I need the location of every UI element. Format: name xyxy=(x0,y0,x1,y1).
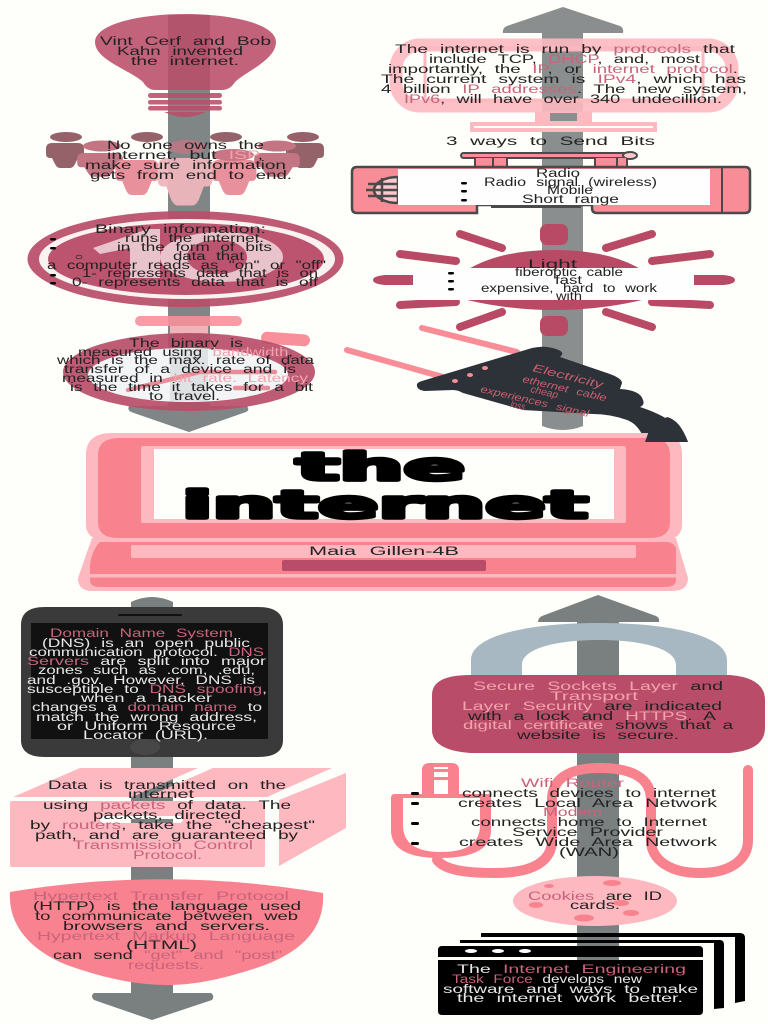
text: ISPs xyxy=(85,140,292,182)
text panel: radio facts xyxy=(398,168,710,206)
text: DNS explanation: changes a domain name to xyxy=(32,702,262,714)
text: DNS explanation xyxy=(27,628,267,742)
text: bandwidth and latency: measured in bit rate. Latency xyxy=(62,373,308,385)
icon: stopwatch gauge xyxy=(63,316,315,411)
icon: plug xyxy=(347,328,688,442)
text panel: radio facts: Radio xyxy=(536,168,580,180)
icon: package box xyxy=(10,768,346,867)
text: HTTP and HTML: Hypertext Markup Language xyxy=(37,931,295,943)
text panel: light facts: fiberoptic cable xyxy=(515,267,623,279)
text: protocols: 4 billion IP addresses . The new system, xyxy=(381,84,747,96)
icon: padlock xyxy=(432,623,765,753)
text panel: light facts: Light xyxy=(528,259,579,271)
panel: radio xyxy=(352,152,750,213)
panel: cookies xyxy=(513,876,677,926)
text: SSL and TLS: Transport xyxy=(550,691,639,703)
text: packets: packets, directed xyxy=(93,810,241,822)
text: electricity facts: Electricity xyxy=(531,362,606,392)
text: electricity facts: experiences signal xyxy=(479,384,591,420)
panel: binary information badge xyxy=(28,211,344,307)
text: electricity facts: loss. xyxy=(509,399,528,414)
text: router and modem list: Wifi Router xyxy=(521,778,624,790)
text: IETF xyxy=(443,964,698,1005)
text: electricity facts: cheap xyxy=(529,384,560,401)
text: cookies: cards. xyxy=(570,900,620,912)
icon: cookie xyxy=(513,876,677,926)
text: protocols xyxy=(381,44,747,106)
text: DNS explanation: or Uniform Resource xyxy=(57,721,236,733)
text: HTTP and HTML: requests. xyxy=(128,960,204,972)
text: ISPs: No one owns the xyxy=(107,140,264,152)
text: binary information list: in the form of bits xyxy=(117,242,272,254)
text: binary information list: a computer reads as "on" or "off" xyxy=(47,260,326,272)
icon: radio xyxy=(352,152,750,213)
text: SSL and TLS: Layer Security are indicated xyxy=(462,701,722,713)
panel: laptop title xyxy=(78,417,688,591)
text: bandwidth and latency: measured using bandwidth , xyxy=(78,347,293,359)
text: DNS explanation: Domain Name System xyxy=(50,628,233,640)
text: HTTP and HTML: can send "get" and "post" xyxy=(53,950,282,962)
panel: SSL lock xyxy=(432,623,765,753)
text: bandwidth and latency: which is the max. rate of data xyxy=(56,355,315,367)
text: DNS explanation: and .gov. However, DNS is xyxy=(27,675,255,687)
text: ISPs: gets from end to end. xyxy=(90,170,292,182)
text: protocols: IPv6 , will have over 340 undecillion. xyxy=(404,94,722,106)
icon: router and cable xyxy=(391,763,748,873)
panel: light xyxy=(373,224,735,336)
icon: group of people xyxy=(46,132,324,206)
text: bandwidth and latency: transfer of a device and is xyxy=(64,364,296,376)
text: inventors: Vint Cerf and Bob xyxy=(100,36,271,48)
text: SSL and TLS xyxy=(462,681,734,742)
text panel: radio facts: Short range xyxy=(522,194,619,206)
text: packets: Data is transmitted on the xyxy=(48,780,286,792)
panel: HTTP shield xyxy=(10,879,323,985)
text: router and modem list: Service Provider xyxy=(512,827,663,839)
text: DNS explanation: communication protocol. DNS xyxy=(29,647,264,659)
text: SSL and TLS: with a lock and HTTPS . A xyxy=(466,711,717,723)
text: bandwidth and latency xyxy=(56,338,315,403)
text: ISPs: internet, but ISP , xyxy=(107,150,263,162)
text: DNS explanation: (DNS) is an open public xyxy=(42,638,250,650)
text: binary information list: Binary information: xyxy=(95,224,266,236)
text panel: light facts: expensive, hard to work xyxy=(481,283,657,295)
icon: laptop base xyxy=(78,538,688,591)
text: IETF: The Internet Engineering xyxy=(457,964,686,976)
panel: wifi router and modem xyxy=(391,763,748,873)
text: DNS explanation: match the wrong address, xyxy=(36,712,257,724)
text: ISPs: make sure information xyxy=(85,160,286,172)
text: router and modem list: Modem xyxy=(543,807,602,819)
text: HTTP and HTML: to communicate between web xyxy=(35,911,298,923)
text panel: light facts: fast xyxy=(555,275,583,287)
text: router and modem list: creates Wide Area Network xyxy=(459,837,717,849)
text: SSL and TLS: Secure Sockets Layer and xyxy=(473,681,723,693)
text: HTTP and HTML xyxy=(33,891,301,972)
panel: packets box xyxy=(10,768,346,867)
text: DNS explanation: when a hacker xyxy=(79,693,212,705)
text: HTTP and HTML: (HTML) xyxy=(126,940,197,952)
text: electricity facts xyxy=(479,362,608,420)
text: HTTP and HTML: Hypertext Transfer Protocol xyxy=(33,891,289,903)
text: binary information list: 0- represents data that is off xyxy=(72,277,319,289)
text: inventors: Kahn invented xyxy=(117,46,243,58)
panel: IETF windows xyxy=(438,933,745,1015)
text: HTTP and HTML: browsers and servers. xyxy=(63,921,270,933)
text: packets: Transmission Control xyxy=(73,840,253,852)
text: inventors: the internet. xyxy=(131,56,239,68)
icon: stacked browser windows xyxy=(438,933,745,1015)
text: IETF: software and ways to make xyxy=(443,984,698,996)
text: SSL and TLS: website is secure. xyxy=(515,730,679,742)
text: router and modem list: connects devices to internet xyxy=(462,788,717,800)
heading: 3 ways to send bits: 3 ways to Send Bits xyxy=(446,134,655,148)
icon: laptop lid xyxy=(86,417,688,541)
text: cookies: Cookies are ID xyxy=(528,891,662,903)
text: packets xyxy=(30,780,315,862)
icon: shield xyxy=(10,879,323,985)
text: binary information list: 1- represents data that is on xyxy=(82,268,318,280)
text: DNS explanation: Locator (URL). xyxy=(83,730,208,742)
text: DNS explanation: susceptible to DNS spoofing , xyxy=(27,684,267,696)
text: packets: internet xyxy=(128,789,195,801)
title: internet xyxy=(182,483,588,527)
text: electricity facts: ethernet cable xyxy=(521,374,608,404)
panel: electricity plug xyxy=(347,328,688,442)
icon: shining light xyxy=(373,224,735,336)
text: IETF: Task Force develops new xyxy=(452,974,643,986)
text: author: Maia Gillen-4B xyxy=(309,546,460,558)
text: packets: Protocol. xyxy=(133,850,202,862)
panel: ISPs and people xyxy=(46,132,324,206)
icon: smartphone xyxy=(21,607,283,757)
text: protocols: importantly, the IP , or internet protocol . xyxy=(388,64,738,76)
icon: light bulb xyxy=(95,14,276,117)
text: bandwidth and latency: to travel. xyxy=(149,391,220,403)
arrow: lower left shaft pointing down xyxy=(92,597,213,1020)
title: the xyxy=(296,445,465,489)
text: IETF: the internet work better. xyxy=(457,993,683,1005)
panel: light bulb inventors xyxy=(95,14,276,117)
text: router and modem list: (WAN) xyxy=(559,847,619,859)
text panel: light facts xyxy=(413,259,694,303)
icon: monitor xyxy=(396,45,732,130)
text: router and modem list xyxy=(411,778,717,859)
panel: protocols monitor xyxy=(381,44,747,130)
text: DNS explanation: Servers are split into major xyxy=(27,656,266,668)
text: packets: path, and are guaranteed by xyxy=(35,830,298,842)
text panel: radio facts: Mobile xyxy=(547,185,593,197)
arrow: upper left shaft pointing down xyxy=(128,15,248,432)
text: bandwidth and latency: is the time it takes for a bit xyxy=(70,382,314,394)
text: SSL and TLS: digital certificate shows that a xyxy=(463,720,734,732)
text: packets: by routers , take the "cheapest" xyxy=(30,820,315,832)
text: bandwidth and latency: The binary is xyxy=(129,338,243,350)
text: DNS explanation: zones such as .com, .edu, xyxy=(38,665,255,677)
text: binary information list xyxy=(47,224,326,289)
text: protocols: The internet is run by protocols that xyxy=(395,44,736,56)
text: protocols: include TCP, DHCP , and, most xyxy=(429,54,701,66)
text: binary information list: data that xyxy=(173,251,245,263)
text panel: light facts: with xyxy=(555,291,582,303)
arrow: lower right shaft pointing up xyxy=(538,595,659,962)
panel: DNS phone xyxy=(21,607,283,757)
text: HTTP and HTML: (HTTP) is the language used xyxy=(33,901,301,913)
arrow: upper right shaft pointing up xyxy=(503,7,623,430)
text panel: radio facts: Radio signal (wireless) xyxy=(484,177,657,189)
text: inventors xyxy=(100,36,271,68)
text: router and modem list: creates Local Area Network xyxy=(458,798,717,810)
text: binary information list: runs the internet. xyxy=(125,233,264,245)
icon: 10 badge xyxy=(28,211,344,307)
text: protocols: The current system is IPv4 , which has xyxy=(381,74,746,86)
text: packets: using packets of data. The xyxy=(43,800,291,812)
text: cookies xyxy=(528,891,662,912)
panel: bandwidth gauge xyxy=(56,316,315,411)
title xyxy=(182,445,588,527)
text: router and modem list: connects home to Internet xyxy=(471,817,708,829)
